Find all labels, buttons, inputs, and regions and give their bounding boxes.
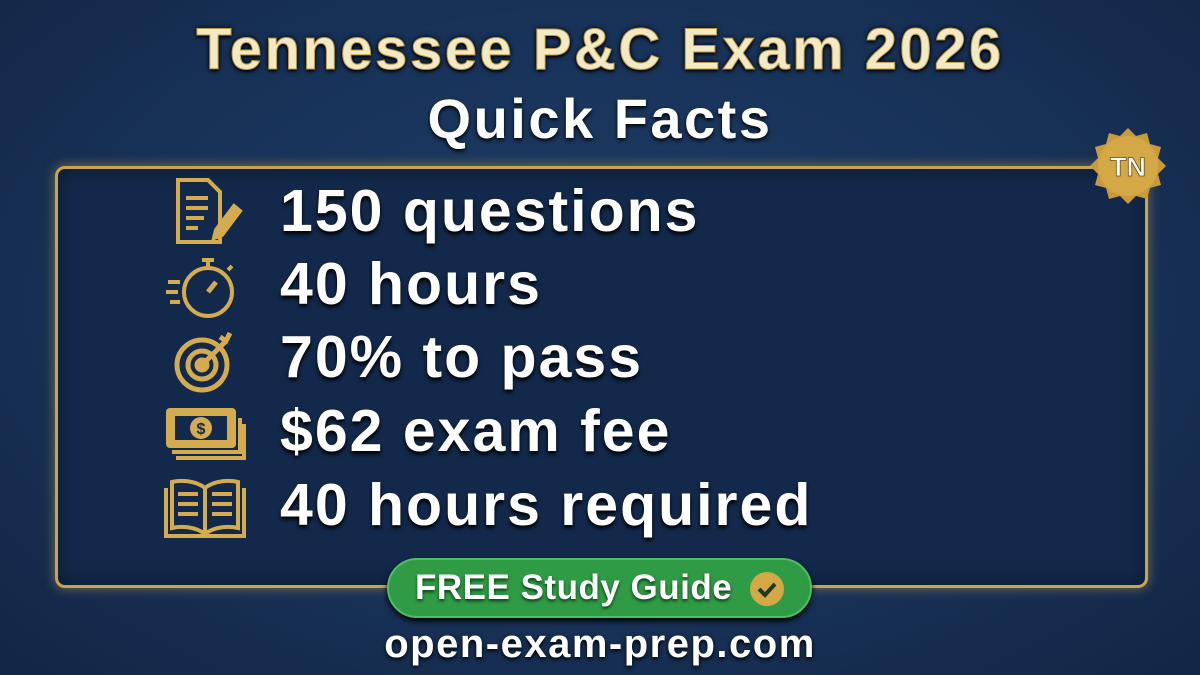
icon: check badge	[750, 572, 784, 606]
button: free study guide: FREE Study Guide	[415, 568, 732, 607]
fact: pass: 70% to pass	[280, 324, 643, 390]
icon: stopwatch	[166, 258, 234, 318]
title: Tennessee P&C Exam 2026	[196, 17, 1004, 82]
button: free study guide	[387, 558, 812, 618]
badge: TN: TN	[1110, 152, 1146, 182]
url: open-exam-prep.com	[384, 622, 816, 666]
fact: required: 40 hours required	[280, 472, 812, 538]
icon: target	[174, 332, 232, 392]
fact: fee: $62 exam fee	[280, 398, 671, 464]
icon: money	[166, 408, 246, 460]
icon: book	[164, 478, 246, 538]
fact: questions: 150 questions	[280, 178, 699, 244]
fact: hours: 40 hours	[280, 251, 542, 317]
icon: money: $	[197, 421, 206, 438]
badge: TN	[1090, 128, 1166, 204]
icon: document	[176, 178, 243, 244]
panel: facts	[55, 166, 1148, 588]
subtitle: Quick Facts	[428, 87, 772, 150]
